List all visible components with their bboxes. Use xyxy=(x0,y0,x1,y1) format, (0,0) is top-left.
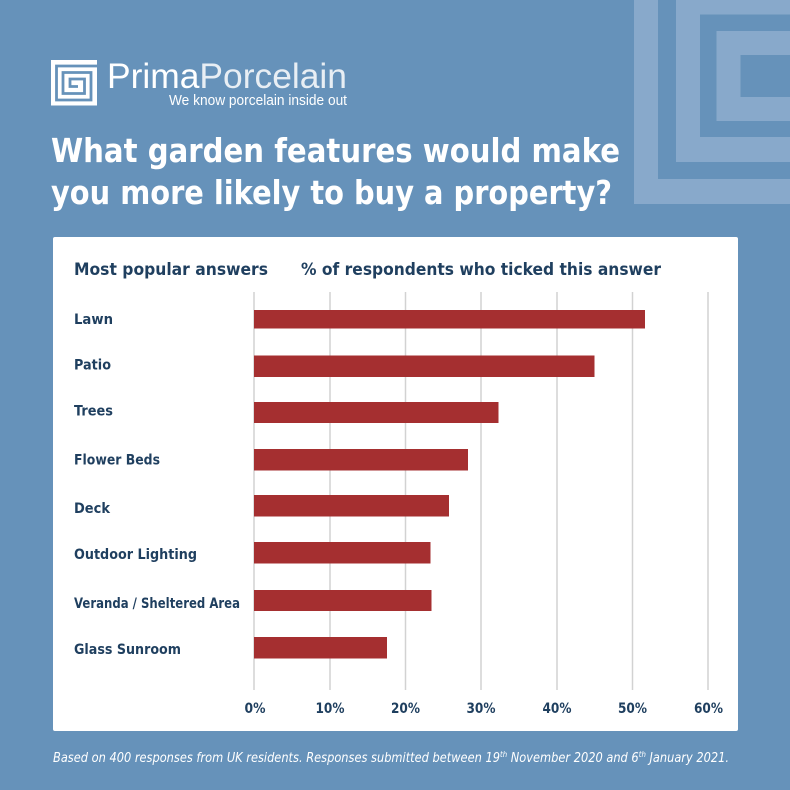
logo icon: square spiral xyxy=(51,60,97,106)
category labels: Patio xyxy=(74,358,111,374)
x axis labels: 20% xyxy=(391,701,420,717)
category labels: Flower Beds xyxy=(74,452,160,468)
footnote: January 2021. xyxy=(646,751,729,766)
title: you more likely to buy a property? xyxy=(51,174,612,212)
footnote: th xyxy=(500,750,507,759)
x axis labels: 0% xyxy=(244,701,266,717)
chart column headings: % of respondents who ticked this answer xyxy=(301,260,662,280)
footnote: th xyxy=(639,750,646,759)
category labels: Veranda / Sheltered Area xyxy=(74,596,240,612)
bars xyxy=(254,310,645,658)
category labels: Outdoor Lighting xyxy=(74,547,197,563)
x axis labels: 40% xyxy=(542,701,572,717)
category labels: Lawn xyxy=(74,312,113,328)
category labels: Deck xyxy=(74,501,110,517)
x axis labels xyxy=(244,701,723,717)
x axis labels: 60% xyxy=(694,701,723,717)
decorative concentric squares xyxy=(634,0,790,204)
bar chart xyxy=(74,292,723,717)
chart column headings xyxy=(74,260,662,280)
logo xyxy=(51,57,347,109)
title xyxy=(51,132,620,212)
chart column headings: Most popular answers xyxy=(74,260,268,280)
panel: chart card xyxy=(53,237,738,731)
category labels xyxy=(74,312,240,658)
footnote: Based on 400 responses from UK residents. Responses submitted between 19 xyxy=(53,751,563,766)
category labels: Glass Sunroom xyxy=(74,642,181,658)
logo wordmark: PrimaPorcelain xyxy=(107,57,347,96)
title: What garden features would make xyxy=(51,132,620,170)
footnote: November 2020 and 6 xyxy=(507,751,639,766)
x axis labels: 10% xyxy=(316,701,344,717)
category labels: Trees xyxy=(74,404,113,420)
x axis labels: 50% xyxy=(618,701,647,717)
x axis labels: 30% xyxy=(466,701,496,717)
logo tagline: We know porcelain inside out xyxy=(169,93,347,109)
